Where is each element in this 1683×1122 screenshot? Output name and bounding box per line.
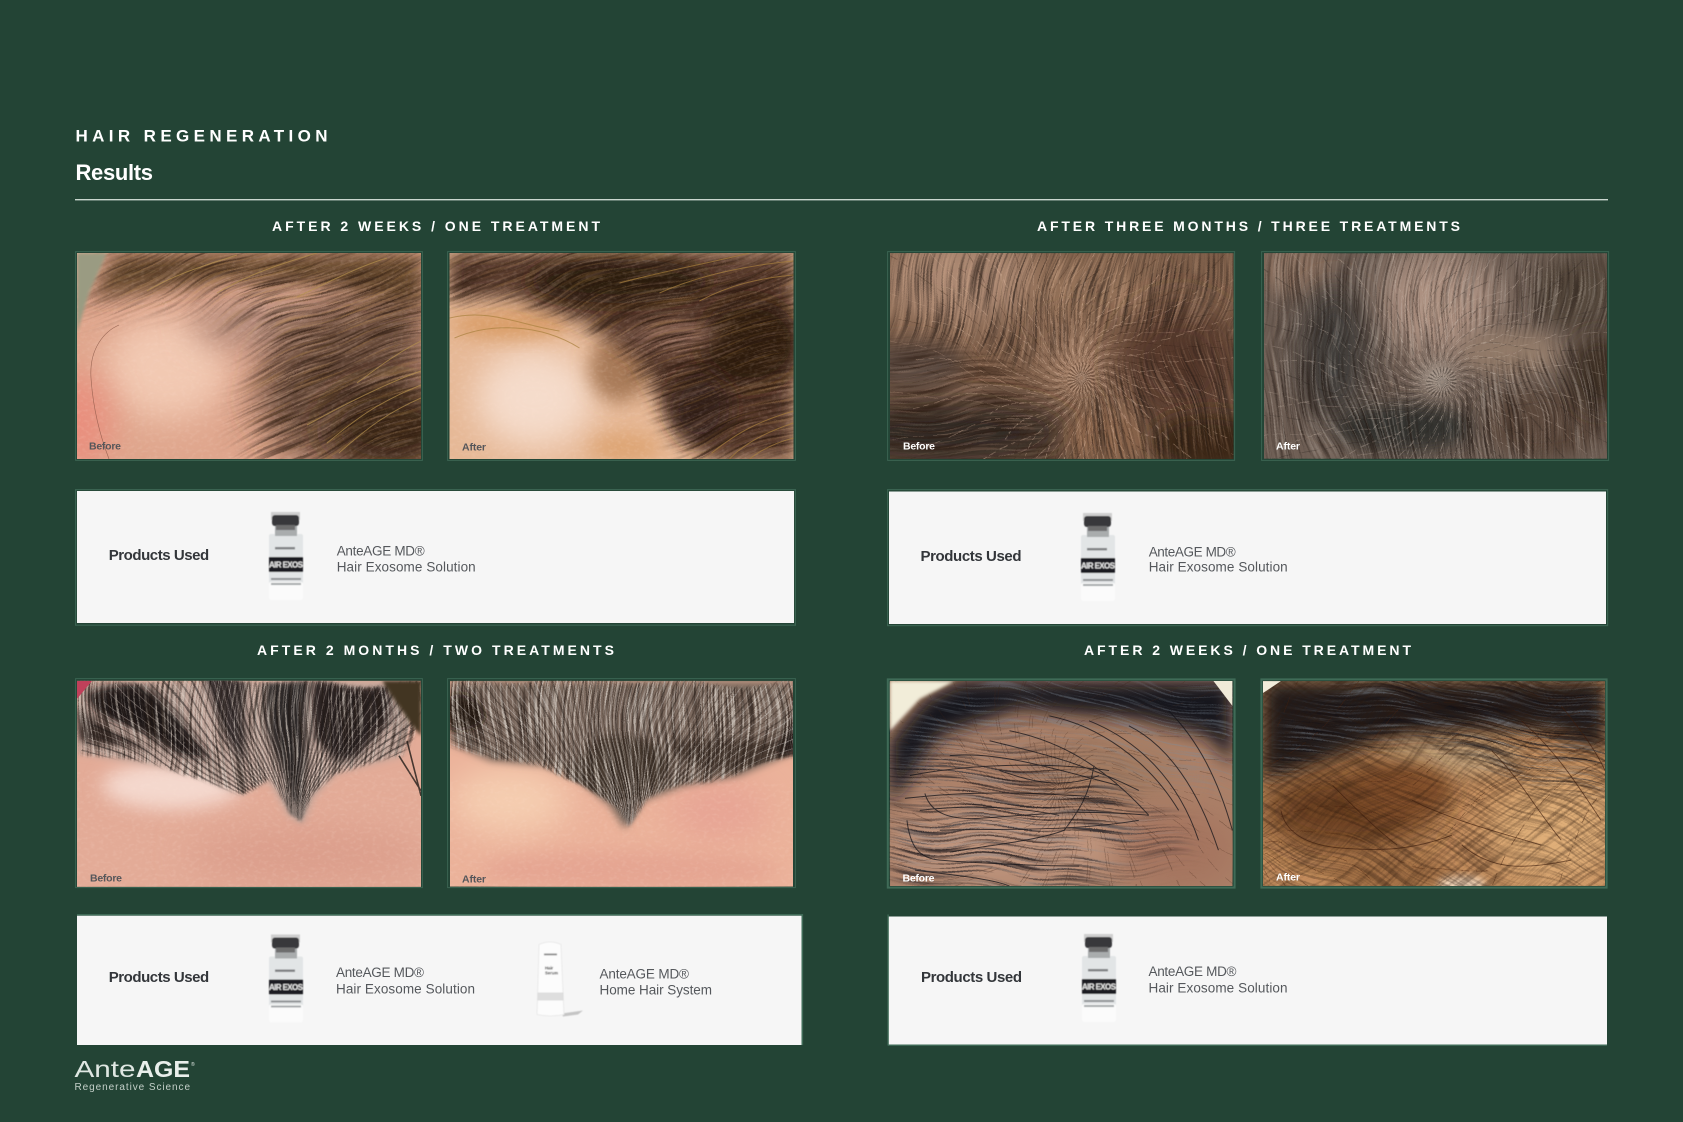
products card: bottom left: AnteAGE MD® — [336, 965, 424, 980]
products card: bottom left: Hair Exosome Solution — [336, 982, 475, 996]
logo: AnteAGE Regenerative Science — [74, 1056, 195, 1093]
icon: exosome vial: AIR EXOS — [269, 983, 304, 992]
products card: top right: Products Used — [920, 548, 1022, 565]
photo: before, top right: Before — [903, 440, 935, 452]
products card: top right: Hair Exosome Solution — [1149, 560, 1288, 574]
photo: before, bottom left — [75, 678, 423, 888]
products card: top right — [888, 490, 1608, 626]
products card: top left — [76, 490, 795, 625]
photo: after, top right: After — [1276, 440, 1300, 452]
section heading: after 2 months: AFTER 2 MONTHS / TWO TREATMENTS — [257, 642, 614, 658]
icon: exosome vial: AIR EXOS — [1082, 982, 1117, 992]
section heading: after three months: AFTER THREE MONTHS / THREE TREATMENTS — [1037, 218, 1460, 234]
icon: exosome vial — [269, 512, 304, 600]
photo: before, top left: Before — [89, 440, 121, 452]
photo: after, bottom right: After — [1276, 872, 1300, 884]
photo: before, top right — [887, 251, 1235, 461]
icon: exosome vial — [1081, 513, 1116, 601]
photo: after, top right — [1261, 251, 1609, 461]
photo: after, top left: After — [462, 442, 486, 454]
photo: after, bottom left: After — [462, 874, 486, 886]
products card: top left: Products Used — [109, 547, 209, 564]
title: Results — [76, 160, 153, 185]
products card: bottom left: Products Used — [109, 969, 209, 986]
products card: top left: AnteAGE MD® — [337, 544, 425, 558]
icon: hair serum tube — [537, 942, 583, 1016]
products card: bottom left — [77, 914, 803, 1045]
products card: bottom left: AnteAGE MD® — [600, 966, 689, 982]
photo: before, bottom left: Before — [90, 872, 122, 884]
products card: bottom right: AnteAGE MD® — [1148, 964, 1237, 979]
icon: exosome vial — [269, 934, 304, 1022]
logo: AnteAGE Regenerative Science: AGE — [136, 1056, 190, 1082]
icon: hair serum tube: Serum — [545, 970, 558, 976]
icon: exosome vial — [1082, 934, 1117, 1022]
section heading: after 2 weeks, bottom right: AFTER 2 WEEKS / ONE TREATMENT — [1084, 642, 1411, 658]
photo: before, top left — [75, 251, 423, 461]
products card: bottom right: Products Used — [921, 969, 1022, 986]
logo: AnteAGE Regenerative Science: Ante — [74, 1056, 136, 1082]
eyebrow heading: HAIR REGENERATION — [76, 126, 328, 146]
logo: AnteAGE Regenerative Science: Regenerative Science — [74, 1082, 190, 1093]
photo: after, top left — [447, 251, 796, 461]
logo: AnteAGE Regenerative Science: ® — [191, 1061, 195, 1068]
icon: exosome vial: AIR EXOS — [269, 560, 304, 570]
photo: before, bottom right: Before — [902, 872, 935, 884]
products card: bottom left: Home Hair System — [600, 982, 712, 998]
icon: hair serum tube: Hair — [545, 966, 554, 970]
photo: after, bottom right — [1260, 678, 1608, 888]
section heading: after 2 weeks, top left: AFTER 2 WEEKS / ONE TREATMENT — [272, 218, 600, 234]
products card: bottom right — [887, 914, 1607, 1046]
photo: after, bottom left — [447, 678, 796, 888]
products card: top left: Hair Exosome Solution — [337, 560, 476, 574]
photo: before, bottom right — [886, 678, 1236, 888]
products card: top right: AnteAGE MD® — [1149, 544, 1236, 560]
products card: bottom right: Hair Exosome Solution — [1148, 980, 1288, 996]
icon: exosome vial: AIR EXOS — [1081, 562, 1116, 570]
